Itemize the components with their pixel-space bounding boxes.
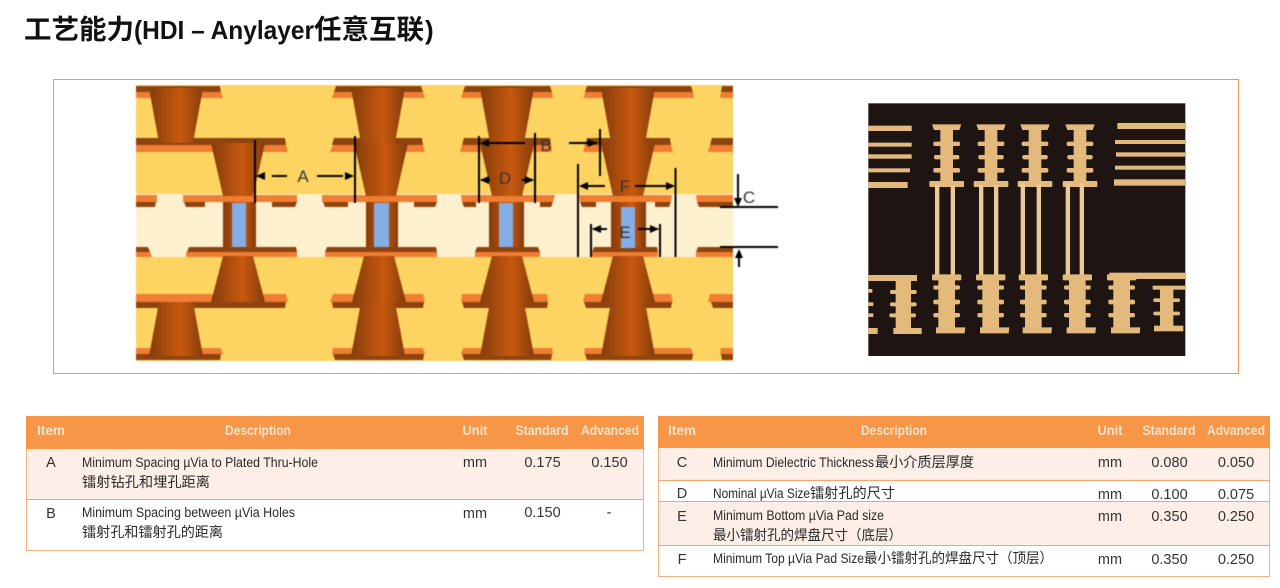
title: (HDI – Anylayer <box>134 15 314 45</box>
row B: B <box>46 506 56 522</box>
row F: 最小镭射孔的焊盘尺寸（顶层） <box>864 548 1053 568</box>
dimension labels: A <box>297 167 309 186</box>
row A: mm <box>463 455 487 471</box>
row E: 最小镭射孔的焊盘尺寸（底层） <box>713 525 902 545</box>
dimension lines <box>255 129 778 267</box>
chart: HDI any-layer stack-up cross section <box>136 85 778 361</box>
row C <box>659 448 1269 480</box>
row E: E <box>677 509 687 525</box>
table header: Advanced <box>1207 423 1265 438</box>
row F: 0.350 <box>1151 552 1188 568</box>
row A: Minimum Spacing µVia to Plated Thru-Hole <box>82 455 318 470</box>
table header: Advanced <box>581 423 639 438</box>
dimension labels: B <box>540 136 552 155</box>
dimension labels: F <box>620 177 630 196</box>
row B: - <box>607 505 612 521</box>
table header: Unit <box>462 423 488 438</box>
core top pads <box>136 195 733 207</box>
table header: Standard <box>1142 423 1196 438</box>
row E <box>659 502 1269 546</box>
table header: Item <box>668 423 696 438</box>
row D: 镭射孔的尺寸 <box>810 483 895 503</box>
row F: Minimum Top µVia Pad Size <box>713 551 864 566</box>
table header: Description <box>225 423 291 438</box>
row C: 0.080 <box>1151 455 1188 471</box>
row E: mm <box>1098 509 1122 525</box>
row F <box>678 548 1254 568</box>
table header: Unit <box>1098 423 1123 438</box>
row D: 0.075 <box>1218 487 1254 503</box>
row B: Minimum Spacing between µVia Holes <box>82 505 295 520</box>
row E: 0.350 <box>1151 509 1188 525</box>
row C: mm <box>1098 455 1122 471</box>
top pads row 1 <box>136 86 733 98</box>
row E: Minimum Bottom µVia Pad size <box>713 508 884 523</box>
row A: 0.175 <box>524 455 561 471</box>
dimension labels <box>297 136 755 242</box>
plated through holes <box>223 202 646 248</box>
row A: A <box>46 455 56 471</box>
row D: mm <box>1098 487 1122 503</box>
panel: diagrams <box>54 80 1238 374</box>
row F: 0.250 <box>1218 552 1254 568</box>
title <box>24 15 434 45</box>
row C: 0.050 <box>1218 455 1254 471</box>
dimension labels: E <box>619 223 631 242</box>
pads row 2 <box>136 138 733 152</box>
title: 工艺能力 <box>24 15 134 45</box>
lower pads <box>136 294 733 360</box>
table header: Description <box>861 423 927 438</box>
microvias stacked <box>149 88 655 356</box>
row C: Minimum Dielectric Thickness <box>713 455 874 470</box>
table: items C to F <box>658 416 1270 576</box>
dimension labels: C <box>743 188 755 207</box>
row F: mm <box>1098 552 1122 568</box>
row A: 镭射钻孔和埋孔距离 <box>82 472 210 492</box>
row A <box>27 449 643 500</box>
table header <box>658 416 1270 448</box>
title: ) <box>425 15 434 45</box>
photo: PCB cross-section micrograph <box>868 103 1185 356</box>
row C: 最小介质层厚度 <box>875 452 974 472</box>
row D: 0.100 <box>1151 487 1188 503</box>
row D: D <box>677 486 687 502</box>
title: 任意互联 <box>314 15 424 45</box>
dimension labels: D <box>499 169 511 188</box>
row F: F <box>678 552 687 568</box>
row B: 0.150 <box>524 505 561 521</box>
row D: Nominal µVia Size <box>713 486 810 501</box>
table header <box>26 416 644 449</box>
table header: Item <box>37 423 65 438</box>
core bottom pads <box>136 247 733 257</box>
row B: 镭射孔和镭射孔的距离 <box>82 522 223 542</box>
row E: 0.250 <box>1218 509 1254 525</box>
table: items A and B <box>26 416 644 550</box>
row A: 0.150 <box>591 455 628 471</box>
dimension arrowheads <box>256 139 743 258</box>
row D <box>677 483 1254 503</box>
table header: Standard <box>516 423 568 438</box>
row C: C <box>677 455 687 471</box>
row B: mm <box>463 506 487 522</box>
row B <box>46 505 612 542</box>
